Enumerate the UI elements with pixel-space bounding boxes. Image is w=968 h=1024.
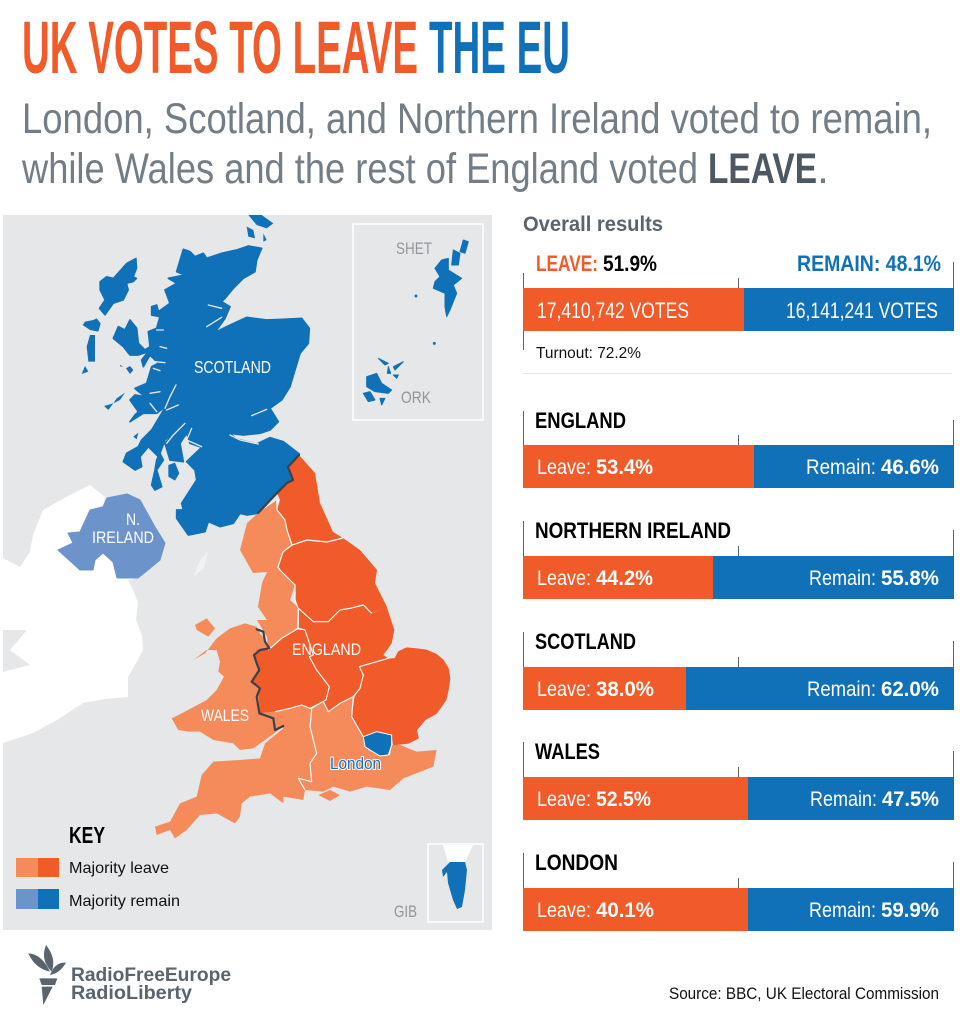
- logo: RFE/RL: RadioLiberty: [71, 983, 192, 1004]
- map: Scottish border: [258, 455, 299, 513]
- map: North West England: [240, 500, 298, 650]
- inset: Gibraltar: [394, 844, 483, 922]
- panel: London: Remain:: [809, 899, 876, 922]
- legend heading: KEY: [69, 822, 105, 848]
- map label: Scotland: SCOTLAND: [194, 357, 271, 377]
- map: South East England: [298, 697, 437, 792]
- panel: England: ENGLAND: [535, 408, 626, 433]
- map: London: [363, 732, 392, 756]
- title: UK VOTES TO LEAVE: [22, 6, 418, 89]
- map: Isle of Man: [193, 552, 208, 577]
- panel: Scotland: [523, 629, 954, 710]
- panel: London: Leave:: [537, 899, 591, 922]
- map label: N. Ireland: IRELAND: [92, 528, 154, 547]
- panel: London: [523, 850, 954, 931]
- leave share: [536, 251, 657, 276]
- panel: Wales: [523, 739, 954, 820]
- label: Shet: SHET: [396, 239, 432, 258]
- map label: England: ENGLAND: [292, 640, 361, 659]
- legend: majority leave: Majority leave: [69, 860, 169, 877]
- turnout: Turnout: 72.2%: [536, 345, 641, 362]
- icon: torch: [28, 945, 66, 1005]
- panel: Northern Ireland: 44.2%: [596, 567, 653, 590]
- panel: Scotland: 38.0%: [596, 678, 654, 701]
- panel: Wales: Leave:: [537, 788, 591, 811]
- legend: majority leave: [16, 858, 169, 877]
- panel: England: Leave:: [537, 456, 591, 479]
- map label: London: London: [330, 754, 381, 773]
- label: Gib: GIB: [394, 902, 417, 921]
- map: regional boundaries: [268, 605, 388, 790]
- label: Ork: ORK: [401, 388, 432, 407]
- panel: Wales: 52.5%: [596, 788, 651, 811]
- subtitle: [21, 95, 932, 193]
- legend: [16, 822, 180, 910]
- panel: England: 46.6%: [881, 456, 939, 479]
- map: South West England: [155, 705, 317, 838]
- panel: Scotland: Remain:: [807, 678, 876, 701]
- map: East Midlands: [298, 605, 394, 712]
- panel: Northern Ireland: Leave:: [537, 567, 591, 590]
- panel: map: [3, 215, 492, 930]
- source: Source: BBC, UK Electoral Commission: [669, 984, 939, 1003]
- legend: majority remain: Majority remain: [69, 893, 180, 910]
- map label: N. Ireland: [92, 510, 154, 547]
- logo: RFE/RL: [28, 945, 231, 1005]
- subtitle: .: [817, 145, 829, 193]
- panel: Northern Ireland: Remain:: [809, 567, 876, 590]
- panel: London: LONDON: [535, 850, 618, 875]
- bar: leave votes: [523, 288, 744, 331]
- overall results: [523, 213, 954, 374]
- inset: Shetland and Orkney: [353, 224, 483, 420]
- legend: majority remain: [16, 889, 180, 910]
- panel: Scotland: 62.0%: [881, 678, 939, 701]
- islands: [363, 240, 468, 405]
- logo: RFE/RL: RadioFreeEurope: [71, 965, 231, 986]
- map: Wales: [172, 618, 283, 750]
- panel: England: [523, 408, 954, 488]
- panel: Wales: WALES: [535, 739, 600, 764]
- map: England and Wales south: [155, 605, 450, 838]
- map: Scottish northern isles: [247, 215, 273, 242]
- map: West Midlands: [252, 629, 329, 713]
- map: Ireland: [3, 485, 143, 743]
- leave share: LEAVE:: [536, 251, 598, 276]
- map: Yorkshire: [278, 538, 387, 622]
- panel: Northern Ireland: [523, 518, 954, 599]
- map: Scotland: [82, 246, 309, 535]
- map: North East England: [277, 455, 343, 545]
- leave share: 51.9%: [603, 251, 657, 276]
- panel: England: 53.4%: [596, 456, 653, 479]
- panel: Northern Ireland: NORTHERN IRELAND: [535, 518, 731, 543]
- panel: Scotland: SCOTLAND: [535, 629, 636, 654]
- panel: London: 59.9%: [881, 899, 939, 922]
- map: Isle of Wight: [318, 790, 340, 801]
- map label: Wales: WALES: [201, 706, 249, 725]
- remain share: REMAIN: 48.1%: [797, 251, 941, 276]
- subtitle: while Wales and the rest of England voted: [21, 145, 698, 193]
- heading: overall results: Overall results: [523, 213, 663, 236]
- map: Northern Ireland: [58, 494, 165, 578]
- panel: London: 40.1%: [596, 899, 654, 922]
- map label: N. Ireland: N.: [126, 510, 140, 529]
- panel: England: Remain:: [806, 456, 876, 479]
- panel: Wales: Remain:: [810, 788, 877, 811]
- map: East of England: [352, 648, 450, 745]
- panel: Northern Ireland: 55.8%: [881, 567, 939, 590]
- bar: remain votes: [744, 288, 954, 331]
- title: THE EU: [429, 6, 570, 89]
- subtitle: LEAVE: [708, 145, 817, 193]
- bar ticks: [524, 262, 954, 350]
- panel: Scotland: Leave:: [537, 678, 591, 701]
- map: Wales border: [252, 629, 283, 730]
- map: northern regional boundaries: [277, 500, 343, 608]
- bar: leave votes: 17,410,742 VOTES: [537, 298, 689, 323]
- panel: Wales: 47.5%: [882, 788, 939, 811]
